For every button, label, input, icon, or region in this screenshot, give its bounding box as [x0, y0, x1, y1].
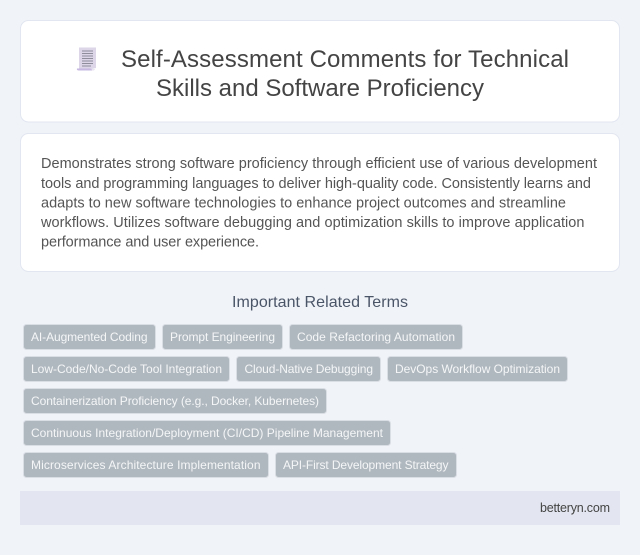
- tag: Microservices Architecture Implementation: Microservices Architecture Implementation: [31, 458, 260, 472]
- title: Skills and Software Proficiency: [156, 75, 484, 102]
- tag: Code Refactoring Automation: Code Refactoring Automation: [297, 330, 455, 344]
- icon: document scroll: [77, 48, 96, 70]
- description text: adapts to new software technologies to enhance project outcomes and streamline: [41, 196, 566, 212]
- tag: AI-Augmented Coding: [24, 324, 156, 350]
- tag: API-First Development Strategy: API-First Development Strategy: [283, 458, 448, 472]
- tag: CI/CD Pipeline Management: [24, 420, 390, 446]
- title: Self-Assessment Comments for Technical: [121, 46, 569, 73]
- tag: Prompt Engineering: Prompt Engineering: [170, 330, 275, 344]
- description text: performance and user experience.: [41, 234, 259, 250]
- panel: related term tags: [24, 324, 568, 478]
- tag: CI/CD Pipeline Management: Continuous Integration/Deployment (CI/CD) Pipeline Management: [31, 426, 384, 440]
- tag: Prompt Engineering: [162, 324, 282, 350]
- footer: betteryn.com: [540, 501, 610, 515]
- tag: Cloud-Native Debugging: [236, 356, 380, 382]
- tag: Cloud-Native Debugging: Cloud-Native Debugging: [244, 362, 373, 376]
- panel: header: [20, 20, 620, 122]
- description text: Demonstrates strong software proficiency through efficient use of various development: [41, 156, 597, 172]
- tag: Code Refactoring Automation: [290, 324, 462, 350]
- description text: workflows. Utilizes software debugging and optimization skills to improve application: [40, 215, 584, 231]
- tag: Low-Code/No-Code Tool Integration: Low-Code/No-Code Tool Integration: [31, 362, 222, 376]
- tag: Microservices Architecture Implementation: [24, 452, 268, 478]
- tag: DevOps Workflow Optimization: DevOps Workflow Optimization: [395, 362, 560, 376]
- footer: [20, 491, 620, 525]
- tag: DevOps Workflow Optimization: [388, 356, 568, 382]
- panel: description: [20, 134, 620, 272]
- tag: API-First Development Strategy: [276, 452, 456, 478]
- title: [121, 46, 569, 102]
- tag: Low-Code/No-Code Tool Integration: [24, 356, 230, 382]
- heading: related terms: Important Related Terms: [232, 294, 408, 311]
- tag: Containerization Proficiency: [24, 388, 326, 414]
- tag: AI-Augmented Coding: AI-Augmented Coding: [31, 330, 148, 344]
- description text: tools and programming languages to deliver high-quality code. Consistently learns and: [41, 176, 591, 192]
- description text: [40, 156, 597, 250]
- tag: Containerization Proficiency: Containerization Proficiency (e.g., Docker, Kubernetes): [31, 394, 319, 408]
